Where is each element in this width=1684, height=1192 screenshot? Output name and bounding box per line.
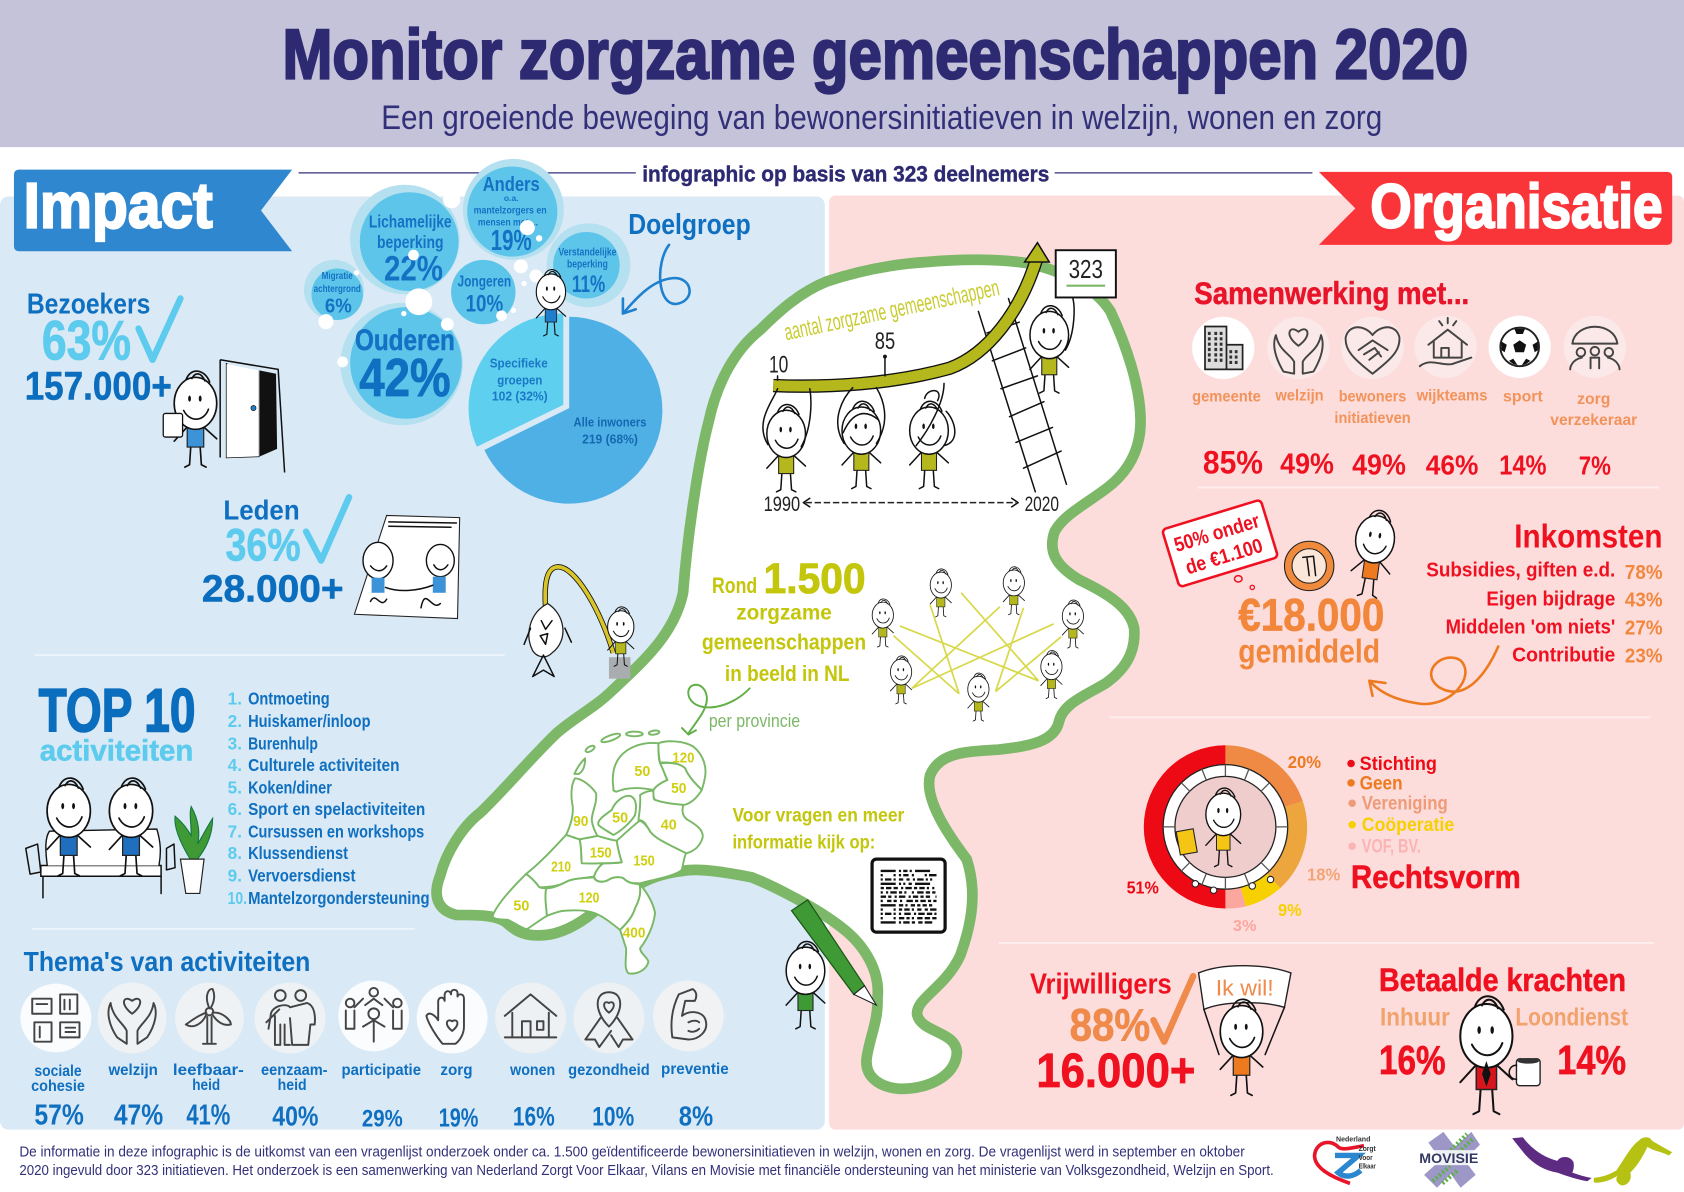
- heading: Rond 1.500 zorgzame gemeenschappen: [702, 555, 866, 686]
- stat: Betaalde krachten: [1379, 962, 1628, 1083]
- pie chart: doelgroep: [469, 314, 662, 504]
- person: [1460, 996, 1512, 1114]
- icon: sociale cohesie: [20, 984, 91, 1052]
- bubble: Lichamelijke beperking: beperking: [377, 232, 444, 252]
- panel: impact background: [0, 197, 825, 1130]
- check mark: [306, 497, 349, 561]
- person: [786, 941, 825, 1029]
- Noord-Brabant: [545, 877, 640, 930]
- percentages: themes: 47%: [114, 1099, 163, 1131]
- percentages: partners: 14%: [1499, 450, 1547, 481]
- heading: Top 10 activiteiten: activiteiten: [40, 734, 193, 767]
- bubble: Verstandelijke beperking: Verstandelijke: [558, 247, 616, 259]
- percentages: partners: 7%: [1579, 453, 1611, 481]
- bubble: Lichamelijke beperking: Lichamelijke: [369, 212, 452, 232]
- pie chart: doelgroep: Alle inwoners: [574, 414, 647, 429]
- segment: VOF BV 3%: [1225, 887, 1246, 909]
- province values: 400: [623, 926, 645, 942]
- bubble: Anders: o.a.: [504, 193, 519, 203]
- heading and list: Inkomsten: Inkomsten: [1514, 519, 1663, 556]
- coffee mug: [1509, 1058, 1540, 1086]
- panel: organisatie background: [829, 195, 1684, 1130]
- labels: partners: wijkteams: [1416, 387, 1488, 405]
- subtitle: Een groeiende beweging van bewonersinitiatieven in welzijn, wonen en zorg: [381, 99, 1382, 137]
- pie chart: doelgroep: 102 (32%): [492, 389, 548, 404]
- segment: Cooperatie 9%: [1240, 873, 1280, 906]
- province values: 50: [671, 781, 686, 797]
- list: top 10 activities: Vervoersdienst: [248, 866, 356, 886]
- heading: Rond 1.500 zorgzame gemeenschappen: Rond: [712, 573, 757, 598]
- jumping person with folder: [1206, 788, 1241, 867]
- plant: [175, 806, 213, 893]
- bubble: Verstandelijke beperking: beperking: [567, 258, 608, 270]
- labels: themes: cohesie: [31, 1077, 85, 1095]
- segment: Stichting 51%: [1144, 745, 1225, 908]
- heading: Rond 1.500 zorgzame gemeenschappen: gemeenschappen: [702, 630, 866, 655]
- province values: 50: [612, 811, 628, 827]
- figure holding the arrow 3: [910, 383, 955, 489]
- stat: Betaalde krachten: 16%: [1379, 1037, 1446, 1083]
- heading and list: Inkomsten: Contributie: [1512, 645, 1615, 667]
- fisherman: [608, 607, 634, 666]
- bubble: Migratie achtergrond: achtergrond: [314, 284, 361, 295]
- Friesland: [613, 743, 667, 792]
- list: top 10 activities: 1.: [228, 688, 242, 708]
- stat: Bezoekers: Bezoekers: [27, 289, 150, 321]
- stat: Bezoekers: [25, 289, 180, 408]
- value 85: [875, 329, 895, 376]
- contact text and QR code: [732, 806, 945, 932]
- list: top 10 activities: 9.: [228, 866, 242, 886]
- stat: Bezoekers: 157.000+: [25, 364, 172, 408]
- segment: Geen 20%: [1225, 745, 1303, 808]
- door: [220, 360, 285, 473]
- bubble: Anders: 19%: [491, 225, 532, 257]
- heading: Rond 1.500 zorgzame gemeenschappen: in beeld in NL: [725, 661, 850, 686]
- list: top 10 activities: Huiskamer/inloop: [248, 711, 371, 731]
- basis line with participants note: infographic op basis van 323 deelnemers: [642, 161, 1049, 186]
- heading and list: Inkomsten: Middelen 'om niets': [1446, 617, 1615, 639]
- heading: Top 10 activiteiten: [39, 676, 195, 767]
- list: top 10 activities: Culturele activiteiten: [248, 755, 400, 775]
- callout: 50% onder de 1.100: [1162, 500, 1278, 590]
- percentages: partners: 46%: [1426, 450, 1479, 481]
- province values: 50: [513, 899, 529, 915]
- Zeeland: [492, 874, 547, 929]
- labels: themes: [31, 1060, 729, 1095]
- percentages: partners: 49%: [1352, 450, 1406, 482]
- percentages: themes: 29%: [362, 1106, 403, 1132]
- illustration: signed contract: [354, 515, 460, 619]
- timeline: 2020: [1025, 492, 1059, 516]
- folder: [1176, 829, 1197, 855]
- province values: 210: [551, 859, 571, 875]
- legend: Rechtsvorm: Stichting: [1360, 754, 1437, 775]
- stat: Bezoekers: 63%: [42, 309, 131, 372]
- labels: partners: verzekeraar: [1550, 411, 1638, 429]
- logo: Nederland Zorgt Voor Elkaar: Nederland: [1336, 1137, 1370, 1144]
- Limburg: [620, 884, 655, 974]
- bubble: Migratie achtergrond: 6%: [325, 295, 352, 317]
- percentages: partners: 49%: [1280, 449, 1334, 481]
- bubble: Ouderen: Ouderen: [355, 324, 455, 357]
- labels: partners: welzijn: [1274, 387, 1324, 405]
- stat: average income: [1238, 589, 1384, 671]
- legend: Rechtsvorm: [1347, 754, 1454, 858]
- percentages: themes: 40%: [272, 1100, 319, 1131]
- growth arrow: [773, 260, 1036, 386]
- labels: themes: gezondheid: [568, 1061, 650, 1079]
- province values: 150: [590, 845, 612, 861]
- figure holding the arrow 2: [838, 388, 885, 489]
- contact text and QR code: Voor vragen en meer: [732, 806, 905, 827]
- labels: themes: zorg: [440, 1061, 473, 1079]
- footer text: De informatie in deze infographic is de uitkomst van een vragenlijst onderzoek onder ca. 1.500 geïdentificeerde bewonersinitiatieven in welzijn, wonen en zorg. De vragenlijst werd in september en oktober: [19, 1144, 1245, 1161]
- list: top 10 activities: 4.: [228, 755, 242, 775]
- stat: Betaalde krachten: Inhuur: [1380, 1005, 1450, 1032]
- figure writing with a pencil: [786, 900, 876, 1029]
- labels: partners: zorg: [1577, 390, 1610, 408]
- callout: 50% onder de 1.100: 50% onder: [1172, 510, 1262, 557]
- heading and list: Inkomsten: [1426, 519, 1663, 668]
- donut chart: Rechtsvorm: 3%: [1233, 917, 1257, 935]
- bench: [26, 829, 175, 898]
- province values: 90: [573, 814, 588, 830]
- logo: Nederland Zorgt Voor Elkaar: Zorgt: [1359, 1146, 1376, 1153]
- illustration: person with banner Ik wil: [1199, 966, 1291, 1095]
- labels: themes: welzijn: [108, 1061, 158, 1079]
- bubble: Ouderen: 42%: [359, 348, 451, 408]
- percentages: themes: 57%: [34, 1099, 84, 1131]
- bubble: Lichamelijke beperking: 22%: [384, 248, 443, 288]
- icon: sport: [1489, 316, 1551, 378]
- illustration: two people on a bench with plant: [26, 778, 213, 898]
- labels: partners: gemeente: [1192, 388, 1261, 406]
- stat: Leden: Leden: [223, 495, 300, 526]
- clipboard: [163, 413, 183, 437]
- list: top 10 activities: Mantelzorgondersteuning: [248, 888, 430, 908]
- legend: Rechtsvorm: VOF, BV.: [1362, 837, 1421, 858]
- legend: Rechtsvorm: Vereniging: [1362, 794, 1448, 815]
- section: doelgroep bubbles: [304, 159, 630, 425]
- stat: Leden: 36%: [226, 520, 301, 571]
- percentages: partners: [1203, 445, 1611, 482]
- province values: 40: [661, 817, 677, 833]
- banner: Ik wil!: [1216, 975, 1274, 1000]
- icon: gemeente: [1192, 317, 1254, 379]
- fish: [524, 604, 571, 677]
- arrow: doelgroep swirl: [623, 245, 690, 314]
- logo: Movisie: [1418, 1132, 1482, 1188]
- percentages: themes: 41%: [186, 1099, 230, 1131]
- per provincie swirl arrow and label: [682, 685, 800, 735]
- list: top 10 activities: Burenhulp: [248, 734, 318, 754]
- list: top 10 activities: 3.: [228, 734, 242, 754]
- divider: [1197, 487, 1659, 489]
- timeline: [764, 492, 1059, 516]
- heading: Doelgroep: Doelgroep: [628, 209, 751, 241]
- figure blowing bubbles: [536, 270, 566, 336]
- bubble: Migratie achtergrond: [304, 260, 364, 320]
- stat: Leden: 28.000+: [202, 567, 344, 609]
- icons: partners: [1192, 316, 1626, 379]
- icon: leefbaarheid: [175, 983, 244, 1053]
- labels: themes: participatie: [342, 1061, 421, 1079]
- bubble: Anders: [463, 159, 564, 260]
- stat: Vrijwilligers: 88%: [1070, 1000, 1150, 1051]
- logo: Movisie: MOVISIE: [1419, 1150, 1478, 1166]
- stat: average income: €18.000: [1238, 589, 1384, 640]
- stat: Vrijwilligers: 16.000+: [1036, 1044, 1195, 1098]
- icon: wonen: [495, 983, 566, 1053]
- list: top 10 activities: 6.: [228, 799, 242, 819]
- soap bubbles: [318, 191, 542, 367]
- heading: Rechtsvorm: Rechtsvorm: [1351, 859, 1521, 895]
- person right: [109, 778, 153, 876]
- list: top 10 activities: 2.: [228, 711, 242, 731]
- person: [1220, 999, 1263, 1095]
- heading and list: Inkomsten: Eigen bijdrage: [1486, 589, 1615, 611]
- network person: [1003, 567, 1024, 615]
- illustration: person at open door: [163, 360, 285, 473]
- bubble: Anders: Anders: [483, 174, 540, 196]
- heading: Rond 1.500 zorgzame gemeenschappen: 1.500: [764, 555, 866, 603]
- province values: 50: [634, 764, 650, 780]
- Noord-Holland: [566, 778, 597, 839]
- labels: themes: eenzaam-: [261, 1061, 328, 1079]
- network person: [968, 673, 989, 721]
- list: top 10 activities: Sport en spelactiviteiten: [248, 799, 425, 819]
- bubble: Migratie achtergrond: Migratie: [322, 271, 353, 282]
- bubble: Jongeren: [451, 260, 516, 324]
- heading: Samenwerking met: Samenwerking met...: [1194, 276, 1469, 311]
- network person: [1062, 600, 1084, 648]
- donut chart: Rechtsvorm: [1127, 745, 1340, 935]
- coin: [1284, 541, 1334, 591]
- person: [1348, 508, 1398, 599]
- bubble: Lichamelijke beperking: [350, 185, 460, 294]
- labels: themes: preventie: [661, 1060, 729, 1078]
- wedge: specifieke groepen: [469, 314, 563, 447]
- donut chart: Rechtsvorm: 18%: [1307, 865, 1340, 885]
- quay post: [609, 657, 630, 679]
- Flevoland: [598, 796, 636, 835]
- illustration: coin and running person: [1284, 508, 1398, 599]
- list: top 10 activities: [228, 688, 430, 908]
- sign 323: 323: [1069, 256, 1103, 284]
- stat: Leden: [202, 495, 349, 609]
- title: Monitor zorgzame gemeenschappen 2020: [282, 15, 1468, 94]
- heading and list: Inkomsten: Subsidies, giften e.d.: [1426, 560, 1615, 582]
- legend: Rechtsvorm: Coöperatie: [1362, 815, 1454, 836]
- list: top 10 activities: 8.: [228, 843, 242, 863]
- icon: eenzaamheid: [255, 983, 325, 1053]
- stat: Betaalde krachten: 14%: [1557, 1037, 1626, 1083]
- value labels: 20%: [1288, 752, 1321, 772]
- icon: preventie: [653, 980, 724, 1051]
- network person: [872, 599, 893, 647]
- labels: partners: initiatieven: [1334, 409, 1411, 427]
- icon: zorgverzekeraar: [1564, 316, 1626, 378]
- heading and list: Inkomsten: 78%: [1625, 562, 1663, 584]
- percentages: themes: [34, 1099, 713, 1132]
- pencil: [792, 900, 876, 1005]
- Groningen: [658, 741, 705, 790]
- list: top 10 activities: Koken/diner: [248, 778, 332, 798]
- heading and list: Inkomsten: 27%: [1625, 618, 1663, 640]
- province values: 120: [579, 891, 599, 907]
- province values: 120: [672, 751, 694, 767]
- heading: Top 10 activiteiten: TOP 10: [39, 676, 195, 744]
- pie chart: doelgroep: groepen: [497, 372, 542, 387]
- arrow: orange swirl: [1369, 646, 1498, 704]
- ribbon: Impact: Impact: [24, 170, 213, 242]
- stat: Vrijwilligers: Vrijwilligers: [1030, 968, 1172, 1000]
- logo: Nederland Zorgt Voor Elkaar: [1315, 1137, 1376, 1183]
- percentages: themes: 10%: [592, 1101, 634, 1131]
- labels: themes: sociale: [34, 1062, 82, 1080]
- heading and list: Inkomsten: 43%: [1625, 590, 1663, 612]
- check mark: [1153, 976, 1193, 1042]
- Gelderland: [594, 821, 686, 883]
- list: top 10 activities: Cursussen en workshops: [248, 822, 424, 842]
- stat: Betaalde krachten: Loondienst: [1515, 1005, 1628, 1032]
- icon: zorg: [417, 983, 488, 1053]
- value 10: 10: [769, 353, 788, 379]
- segment: Vereniging 18%: [1266, 801, 1307, 888]
- bubble: Anders: mantelzorgers en: [474, 206, 547, 217]
- timeline: 1990: [764, 492, 800, 516]
- list: top 10 activities: Ontmoeting: [248, 688, 330, 708]
- donut chart: Rechtsvorm: 51%: [1127, 877, 1159, 897]
- bubble: Anders: mensen met ...: [478, 218, 538, 229]
- Drenthe: [653, 763, 702, 805]
- donut chart: Rechtsvorm: 9%: [1278, 900, 1302, 920]
- labels: themes: leefbaar-: [173, 1061, 244, 1079]
- tie: [1482, 1061, 1491, 1087]
- person: [174, 371, 217, 467]
- province values: 150: [633, 853, 655, 869]
- icons: themes: [20, 980, 724, 1053]
- Wadden islands: [574, 730, 660, 774]
- footer: [0, 1130, 1684, 1192]
- ribbon: Impact: [14, 170, 292, 251]
- network person: [890, 656, 912, 704]
- network person: [1041, 651, 1062, 699]
- figure fishing: [524, 567, 634, 679]
- legend: Rechtsvorm: Geen: [1360, 773, 1403, 794]
- heading and list: Inkomsten: 23%: [1625, 646, 1663, 668]
- value 85: 85: [875, 329, 895, 355]
- province map: [492, 730, 705, 974]
- labels: partners: bewoners: [1339, 388, 1406, 406]
- chart: growth of zorgzame gemeenschappen: [763, 243, 1116, 516]
- icon: bewoners initiatieven: [1341, 317, 1404, 379]
- divider: [34, 654, 505, 656]
- percentages: themes: 16%: [513, 1101, 555, 1131]
- logo: Nederland Zorgt Voor Elkaar: Voor: [1359, 1155, 1373, 1162]
- icon: welzijn: [1267, 317, 1330, 379]
- check mark: [139, 299, 180, 360]
- footer text: 2020 ingevuld door 323 initiatieven. Het onderzoek is een samenwerking van Nederland Zorgt Voor Elkaar, Vilans en Movisie met financiële ondersteuning van het ministerie van Volksgezondheid, Welzijn en Sport.: [19, 1162, 1274, 1179]
- list: top 10 activities: 10.: [228, 888, 247, 908]
- trampoline: [1163, 765, 1288, 893]
- network person: [930, 569, 951, 617]
- divider: [32, 928, 415, 930]
- percentages: themes: 19%: [439, 1104, 479, 1132]
- logo: Nederland Zorgt Voor Elkaar: Elkaar: [1359, 1163, 1376, 1170]
- icon: wijkteams: [1414, 316, 1477, 378]
- bubble: Jongeren: Jongeren: [458, 273, 511, 291]
- callout: 50% onder de 1.100: de €1.100: [1183, 535, 1265, 579]
- fishing rod: [545, 567, 613, 653]
- icon: gezondheid: [574, 983, 644, 1053]
- list: top 10 activities: 7.: [228, 822, 242, 842]
- sign 323: [1056, 250, 1116, 297]
- heading: Thema's van activiteiten: Thema's van activiteiten: [24, 946, 310, 977]
- heading: Rond 1.500 zorgzame gemeenschappen: zorgzame: [736, 601, 832, 625]
- Utrecht: [579, 836, 622, 864]
- illustration: person with coffee: [1460, 996, 1540, 1114]
- pie chart: doelgroep: Specifieke: [490, 355, 548, 370]
- wedge: alle inwoners: [484, 317, 662, 504]
- stat: average income: gemiddeld: [1238, 634, 1380, 671]
- divider: [1109, 716, 1651, 718]
- labels: themes: heid: [192, 1076, 220, 1094]
- QR code: [872, 859, 945, 932]
- ladder: [978, 299, 1066, 492]
- divider: [999, 942, 1654, 944]
- icon: welzijn: [98, 983, 166, 1053]
- figure holding the arrow 1: [763, 389, 811, 492]
- network of people: [872, 567, 1084, 721]
- contact text and QR code: informatie kijk op:: [732, 832, 875, 853]
- list: top 10 activities: 5.: [228, 778, 242, 798]
- labels: themes: wonen: [509, 1061, 555, 1079]
- figure on ladder holding the sign: [1030, 299, 1074, 393]
- bubble: Jongeren: 10%: [466, 291, 503, 317]
- person left: [47, 778, 90, 876]
- curved chart label: aantal zorgzame gemeenschappen: [782, 275, 1002, 346]
- percentages: partners: 85%: [1203, 445, 1263, 481]
- icon: participatie: [338, 980, 409, 1051]
- Overijssel: [638, 791, 703, 853]
- stat: Vrijwilligers: [1030, 968, 1195, 1098]
- footer text: [19, 1144, 1274, 1179]
- province values: [513, 751, 694, 942]
- per provincie swirl arrow and label: per provincie: [709, 710, 800, 731]
- labels: themes: heid: [278, 1076, 307, 1094]
- stat: Betaalde krachten: Betaalde krachten: [1379, 962, 1626, 998]
- bubble: Verstandelijke beperking: [547, 223, 630, 307]
- percentages: themes: 8%: [679, 1100, 713, 1131]
- header band: [0, 0, 1684, 147]
- pie chart: doelgroep: 219 (68%): [582, 432, 638, 447]
- logo: divers: [1512, 1137, 1672, 1186]
- labels: partners: [1192, 387, 1638, 429]
- bubble: Verstandelijke beperking: 11%: [572, 272, 605, 298]
- bubble: Ouderen: [340, 303, 463, 425]
- Zuid-Holland: [526, 835, 603, 887]
- list: top 10 activities: Klussendienst: [248, 843, 348, 863]
- map of the Netherlands: outline: [437, 260, 1141, 1089]
- labels: partners: sport: [1503, 388, 1543, 406]
